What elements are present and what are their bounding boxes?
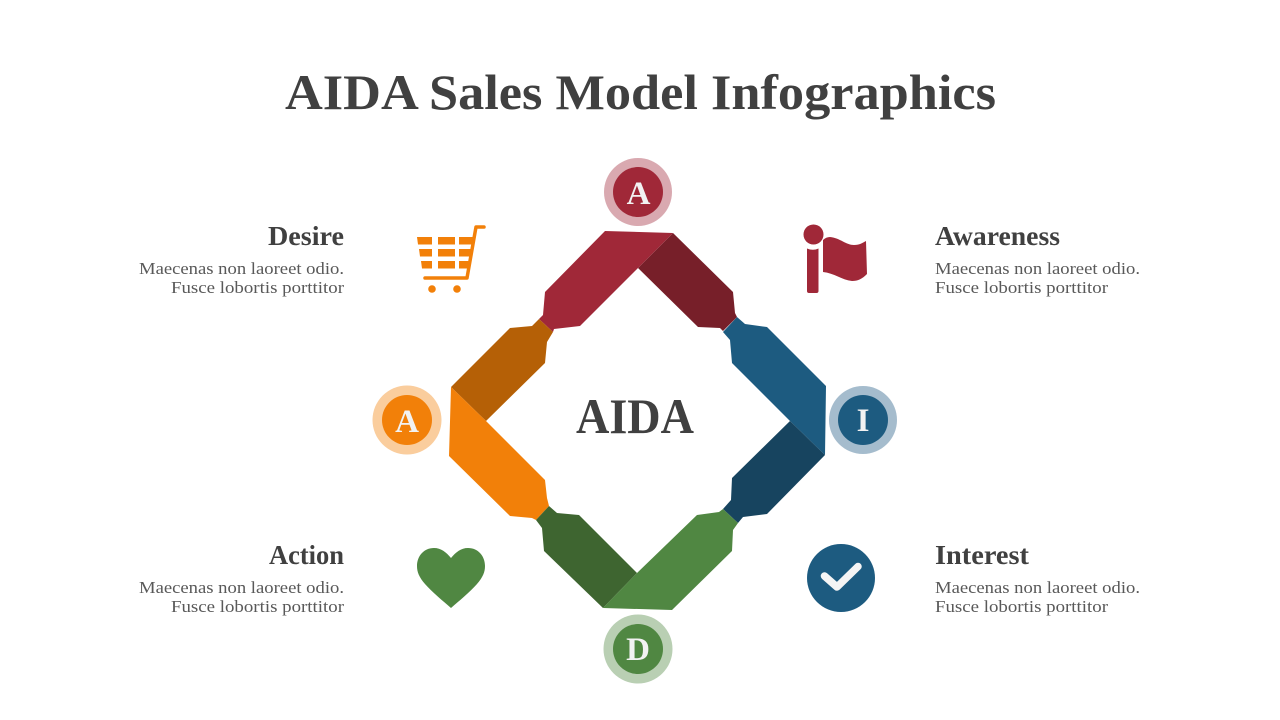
text block: Interest — [935, 540, 1140, 616]
badge: A left — [372, 386, 442, 454]
icon: flag — [804, 224, 867, 293]
badge: D bottom: D — [626, 632, 650, 668]
title: AIDA Sales Model Infographics — [285, 64, 996, 120]
text block: Action — [139, 540, 345, 616]
text block: Desire — [139, 221, 345, 297]
badge: D bottom — [604, 614, 672, 684]
badge: A top — [604, 158, 672, 226]
badge: I right — [829, 386, 897, 454]
text block: Action: Fusce lobortis porttitor — [171, 597, 345, 616]
text block: Action: Maecenas non laoreet odio. — [139, 578, 344, 597]
text block: Action: Action — [269, 540, 344, 570]
text block: Desire: Fusce lobortis porttitor — [171, 278, 345, 297]
icon: heart — [417, 548, 485, 608]
segment: action light — [603, 509, 738, 610]
segment: awareness light — [539, 231, 673, 332]
segment: desire dark — [451, 319, 553, 421]
center label: AIDA — [576, 388, 694, 444]
icon: shopping cart — [417, 227, 484, 293]
icon: check circle — [807, 544, 875, 612]
badge: A top: A — [627, 176, 651, 212]
text block: Desire: Maecenas non laoreet odio. — [139, 259, 344, 278]
text block: Awareness: Fusce lobortis porttitor — [935, 278, 1109, 297]
text block: Desire: Desire — [268, 221, 344, 251]
segment: interest dark — [723, 421, 825, 523]
badge: A left: A — [395, 404, 419, 440]
text block: Awareness — [935, 221, 1140, 297]
diamond cycle diagram — [449, 231, 826, 610]
segment: awareness dark — [638, 233, 737, 331]
text block: Awareness: Awareness — [935, 221, 1060, 251]
badge: I right: I — [857, 403, 869, 439]
text block: Interest: Fusce lobortis porttitor — [935, 597, 1109, 616]
segment: action dark — [536, 506, 637, 608]
segment: desire light — [449, 387, 549, 520]
segment: interest light — [723, 317, 826, 455]
text block: Interest: Maecenas non laoreet odio. — [935, 578, 1140, 597]
text block: Interest: Interest — [935, 540, 1029, 570]
text block: Awareness: Maecenas non laoreet odio. — [935, 259, 1140, 278]
